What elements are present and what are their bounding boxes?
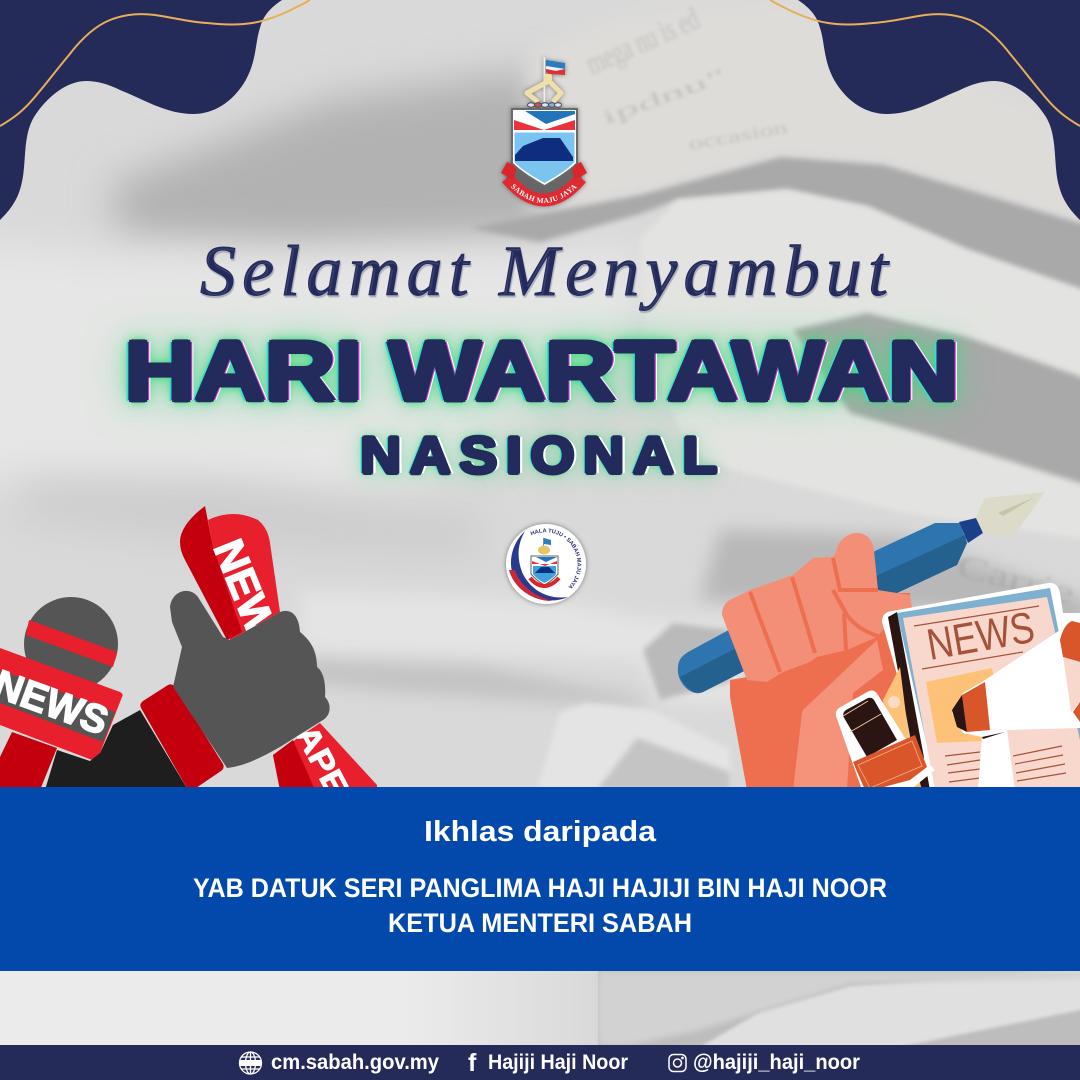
microphone: head xyxy=(24,597,118,691)
newspaper: upper face xyxy=(208,514,280,640)
microphone xyxy=(0,597,123,790)
megaphone: handle shadow xyxy=(982,732,1005,739)
pen hand: wrist highlight xyxy=(793,640,883,790)
microphone: handle xyxy=(0,732,57,790)
tag hole xyxy=(888,696,900,708)
message: sender title: KETUA MENTERI SABAH xyxy=(388,908,692,938)
microphone: flag stripe xyxy=(0,670,115,742)
tablet: spine xyxy=(888,612,930,790)
greeting script: Selamat Menyambut xyxy=(200,231,890,311)
tablet: picture xyxy=(926,668,1003,743)
marker: outline xyxy=(836,691,935,790)
thumbs up hand xyxy=(45,591,330,790)
newspaper: lower face xyxy=(273,723,377,790)
icon: instagram xyxy=(669,1054,686,1072)
pen: nib slit xyxy=(998,497,1035,516)
hand: fist xyxy=(170,591,330,768)
marker: body xyxy=(843,698,897,757)
pen: nib xyxy=(976,492,1045,537)
title: Hari Wartawan: HARI WARTAWAN xyxy=(125,324,958,418)
logo: red crescent xyxy=(509,570,552,601)
newspaper: upper text: NEWS xyxy=(205,533,296,669)
fountain pen xyxy=(678,492,1045,693)
crest: motto: SABAH MAJU JAYA xyxy=(511,184,577,204)
megaphone xyxy=(952,613,1080,790)
marker and tag xyxy=(836,667,935,790)
icon: globe xyxy=(240,1052,262,1074)
blue message band xyxy=(0,787,1080,971)
pen: collar xyxy=(959,518,983,543)
megaphone: bell inner xyxy=(1063,657,1080,712)
tablet: page xyxy=(903,597,1080,790)
newspaper: upper flap xyxy=(180,506,242,640)
pen hand: finger creases xyxy=(750,558,878,672)
crest: artwork xyxy=(501,57,587,200)
faint newspaper print xyxy=(580,0,1078,611)
Hala Tuju logo xyxy=(503,521,589,608)
logo: blue crescent xyxy=(511,531,568,600)
rolled newspaper xyxy=(180,506,377,825)
top right navy corner xyxy=(798,0,1080,220)
megaphone: orange band xyxy=(962,682,990,732)
microphone: head band xyxy=(26,620,117,667)
pen hand: palm xyxy=(730,593,910,790)
newspaper: lower flap xyxy=(273,740,315,790)
pen: body shade xyxy=(680,535,967,693)
website: cm.sabah.gov.my xyxy=(271,1051,439,1074)
tag xyxy=(883,667,922,790)
faint newspaper print: ipdnu" xyxy=(599,65,729,130)
facebook name: Hajiji Haji Noor xyxy=(488,1051,628,1074)
gold curve left xyxy=(0,0,310,126)
gold curve right xyxy=(770,0,1080,126)
footer bar xyxy=(0,1045,1080,1080)
megaphone: bell lower xyxy=(1073,702,1080,722)
marker: cap inset xyxy=(858,741,922,788)
top left navy corner xyxy=(0,0,282,220)
tablet: rules xyxy=(914,606,1066,782)
pen: body xyxy=(678,523,967,693)
message: greeting: Ikhlas daripada xyxy=(424,816,657,848)
faint newspaper print: occasion xyxy=(687,117,789,154)
hand: sleeve xyxy=(45,710,188,790)
newspaper: lower text: APER xyxy=(289,719,368,825)
Sabah state crest xyxy=(500,56,589,210)
hand: cuff xyxy=(140,684,224,790)
instagram handle: @hajiji_haji_noor xyxy=(693,1051,860,1074)
marker: lines xyxy=(843,701,881,732)
microphone: flag xyxy=(0,648,123,761)
logo: ring text: HALA TUJU • SABAH MAJU JAYA xyxy=(530,528,582,588)
faint newspaper print: Carrie xyxy=(953,547,1078,611)
icon: facebook: f xyxy=(468,1049,477,1077)
megaphone: white body xyxy=(952,613,1080,790)
tablet: frame xyxy=(897,588,1080,790)
marker: cap xyxy=(853,735,927,790)
tablet: NEWS heading: NEWS xyxy=(923,603,1038,670)
newspaper tablet xyxy=(882,583,1080,790)
hand holding pen xyxy=(722,533,912,790)
message: sender name: YAB DATUK SERI PANGLIMA HAJI HAJIJI BIN HAJI NOOR xyxy=(193,873,887,903)
pen hand: fingers xyxy=(722,533,912,682)
tablet: outline xyxy=(882,583,1080,790)
subtitle: Nasional: NASIONAL xyxy=(360,427,726,485)
megaphone: dark tip xyxy=(952,695,967,732)
logo: mini crest xyxy=(530,538,559,586)
megaphone: bell xyxy=(1060,621,1080,662)
